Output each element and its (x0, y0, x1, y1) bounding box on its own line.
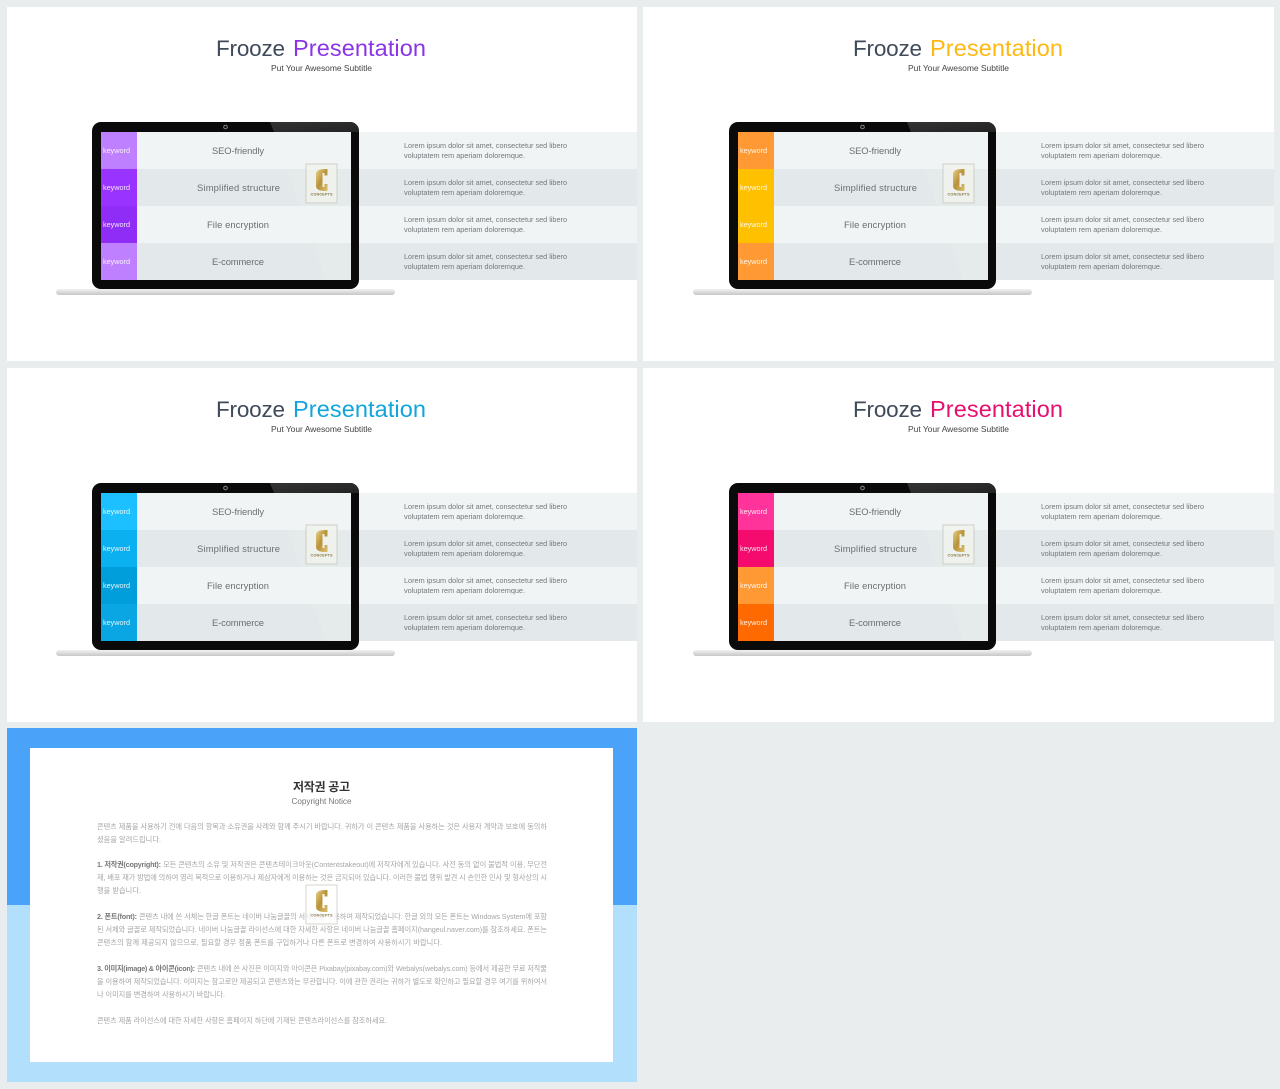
title (216, 35, 426, 61)
laptop: Simplified structure (834, 543, 917, 554)
descriptions: voluptatem rem aperiam doloremque. (1041, 188, 1162, 197)
title: Frooze (216, 36, 285, 61)
descriptions (1041, 141, 1204, 271)
feature bands (359, 132, 637, 280)
intro paragraph: 셨음을 알려드립니다. (97, 835, 161, 844)
section: copyright: 재, 배포 재가 방법에 의하여 영리 목적으로 이용하거나 제삼자에게 이용하는 것은 금지되어 있습니다. 이러한 불법 행위 발견 시 손인한 민사 및 형사상의 시 (97, 873, 547, 882)
feature bands (359, 493, 637, 641)
laptop: Simplified structure (834, 182, 917, 193)
section: font (97, 912, 547, 947)
laptop: keyword (103, 257, 130, 266)
title (216, 396, 426, 422)
laptop: Simplified structure (197, 182, 280, 193)
descriptions: Lorem ipsum dolor sit amet, consectetur sed libero (1041, 141, 1204, 150)
laptop: File encryption (844, 580, 906, 591)
descriptions: voluptatem rem aperiam doloremque. (1041, 623, 1162, 632)
laptop: SEO-friendly (212, 506, 264, 517)
closing line: 콘텐츠 제품 라이선스에 대한 자세한 사항은 홈페이지 하단에 기재된 콘텐츠라이선스를 참조하세요. (97, 1016, 387, 1025)
descriptions: Lorem ipsum dolor sit amet, consectetur sed libero (404, 178, 567, 187)
panel: pink slide (643, 368, 1274, 722)
descriptions: Lorem ipsum dolor sit amet, consectetur sed libero (1041, 178, 1204, 187)
laptop: keyword (740, 257, 767, 266)
feature bands (996, 132, 1274, 280)
panel: blue slide (7, 368, 637, 722)
section: image and icon: 나 이미지를 변경하여 사용하시기 바랍니다. (97, 990, 225, 999)
section: copyright: 모든 콘텐츠의 소유 및 저작권은 콘텐츠테이크아웃(Contentstakeout)에 저작자에게 있습니다. 사전 동의 없이 불법적 이용, 무단전 (163, 860, 547, 869)
laptop: keyword (103, 146, 130, 155)
logo (943, 525, 974, 564)
descriptions: voluptatem rem aperiam doloremque. (1041, 151, 1162, 160)
descriptions: voluptatem rem aperiam doloremque. (404, 151, 525, 160)
section: image and icon: 을 이용하여 제작되었습니다. 이미지는 참고로만 제공되고 콘텐츠와는 무관합니다. 이에 관한 권리는 귀하가 별도로 확인하고 필요할 경우 여기를 위하여서 (97, 977, 547, 986)
laptop: keyword (740, 146, 767, 155)
laptop (56, 483, 395, 656)
section: copyright: 행을 받습니다. (97, 886, 141, 895)
descriptions: Lorem ipsum dolor sit amet, consectetur sed libero (1041, 576, 1204, 585)
laptop: E-commerce (212, 617, 264, 628)
descriptions: Lorem ipsum dolor sit amet, consectetur sed libero (1041, 215, 1204, 224)
title (853, 35, 1063, 61)
panel: copyright notice (7, 728, 637, 1082)
descriptions: Lorem ipsum dolor sit amet, consectetur sed libero (1041, 539, 1204, 548)
title: Presentation (930, 396, 1063, 422)
section: copyright: 1. 저작권(copyright): (97, 860, 161, 869)
panel: orange slide (643, 7, 1274, 361)
laptop: keyword (103, 220, 130, 229)
descriptions: voluptatem rem aperiam doloremque. (404, 623, 525, 632)
subtitle: Put Your Awesome Subtitle (271, 63, 372, 73)
descriptions: Lorem ipsum dolor sit amet, consectetur sed libero (404, 215, 567, 224)
logo: CONCEPTS (948, 554, 970, 558)
descriptions: voluptatem rem aperiam doloremque. (1041, 225, 1162, 234)
descriptions: Lorem ipsum dolor sit amet, consectetur sed libero (1041, 613, 1204, 622)
logo: CONCEPTS (310, 554, 333, 558)
notice subheading: Copyright Notice (292, 797, 352, 806)
descriptions (1041, 502, 1204, 632)
descriptions (404, 502, 567, 632)
laptop: keyword (103, 581, 130, 590)
laptop: File encryption (207, 580, 269, 591)
descriptions: voluptatem rem aperiam doloremque. (1041, 549, 1162, 558)
subtitle: Put Your Awesome Subtitle (908, 63, 1009, 73)
laptop: E-commerce (849, 617, 901, 628)
descriptions (404, 141, 567, 271)
descriptions: voluptatem rem aperiam doloremque. (404, 549, 525, 558)
title: Presentation (930, 35, 1063, 61)
laptop: SEO-friendly (849, 506, 901, 517)
title: Presentation (293, 35, 426, 61)
logo: CONCEPTS (948, 192, 970, 196)
laptop: keyword (740, 581, 767, 590)
section: font: 콘텐츠의 함께 제공되지 않으므로, 필요할 경우 정품 폰트를 구입하거나 다른 폰트로 변경하여 사용하시기 바랍니다. (97, 938, 442, 947)
laptop: keyword (103, 507, 130, 516)
descriptions: Lorem ipsum dolor sit amet, consectetur sed libero (404, 141, 567, 150)
laptop: E-commerce (849, 256, 901, 267)
notice heading: 저작권 공고 (293, 779, 350, 794)
laptop (56, 122, 395, 295)
descriptions: Lorem ipsum dolor sit amet, consectetur sed libero (404, 252, 567, 261)
panel: purple slide (7, 7, 637, 361)
descriptions: Lorem ipsum dolor sit amet, consectetur sed libero (404, 613, 567, 622)
descriptions: Lorem ipsum dolor sit amet, consectetur sed libero (404, 502, 567, 511)
laptop: Simplified structure (197, 543, 280, 554)
section: image and icon (97, 964, 547, 999)
watermark logo (306, 885, 337, 924)
section: image and icon: 콘텐츠 내에 쓴 사진은 이미지와 아이콘은 Pixabay(pixabay.com)와 Webalys(webalys.com) 등에서 제공한 무료 저작물 (197, 964, 547, 973)
logo: CONCEPTS (310, 192, 333, 196)
descriptions: voluptatem rem aperiam doloremque. (404, 188, 525, 197)
laptop: keyword (103, 618, 130, 627)
laptop: keyword (103, 183, 130, 192)
descriptions: Lorem ipsum dolor sit amet, consectetur sed libero (404, 539, 567, 548)
laptop: keyword (740, 220, 767, 229)
title (853, 396, 1063, 422)
section: font: 된 서체와 글꼴로 제작되었습니다. 네이버 나눔글꼴 라이선스에 대한 자세한 사항은 네이버 나눔글꼴 홈페이지(hangeul.naver.com)를 참조하세요. 폰트는 (97, 925, 547, 934)
laptop (693, 483, 1032, 656)
laptop: keyword (740, 183, 767, 192)
watermark logo: CONCEPTS (310, 914, 333, 918)
descriptions: voluptatem rem aperiam doloremque. (1041, 512, 1162, 521)
section: image and icon: 3. 이미지(image) & 아이콘(icon): (97, 964, 195, 973)
descriptions: voluptatem rem aperiam doloremque. (404, 512, 525, 521)
laptop: keyword (103, 544, 130, 553)
laptop: SEO-friendly (849, 145, 901, 156)
logo (943, 164, 974, 203)
section: font: 콘텐츠 내에 쓴 서체는 한글 폰트는 네이버 나눔글꼴의 서체들을 이용하여 제작되었습니다. 한글 외의 모든 폰트는 Windows System에 포함 (139, 912, 547, 921)
laptop: keyword (740, 544, 767, 553)
title: Frooze (216, 397, 285, 422)
laptop: keyword (740, 507, 767, 516)
laptop: SEO-friendly (212, 145, 264, 156)
logo (306, 525, 337, 564)
descriptions: voluptatem rem aperiam doloremque. (404, 586, 525, 595)
intro paragraph: 콘텐츠 제품을 사용하기 전에 다음의 항목과 소유권을 사례와 함께 주시기 바랍니다. 귀하가 이 콘텐츠 제품을 사용하는 것은 사용자 계약과 보호에 동의하 (97, 822, 547, 831)
title: Frooze (853, 397, 922, 422)
title: Presentation (293, 396, 426, 422)
subtitle: Put Your Awesome Subtitle (271, 424, 372, 434)
laptop: File encryption (207, 219, 269, 230)
laptop: keyword (740, 618, 767, 627)
descriptions: voluptatem rem aperiam doloremque. (1041, 262, 1162, 271)
laptop: File encryption (844, 219, 906, 230)
laptop (693, 122, 1032, 295)
title: Frooze (853, 36, 922, 61)
feature bands (996, 493, 1274, 641)
descriptions: Lorem ipsum dolor sit amet, consectetur sed libero (1041, 252, 1204, 261)
section: font: 2. 폰트(font): (97, 912, 137, 921)
descriptions: voluptatem rem aperiam doloremque. (1041, 586, 1162, 595)
descriptions: voluptatem rem aperiam doloremque. (404, 225, 525, 234)
descriptions: voluptatem rem aperiam doloremque. (404, 262, 525, 271)
logo (306, 164, 337, 203)
intro paragraph (97, 822, 547, 844)
subtitle: Put Your Awesome Subtitle (908, 424, 1009, 434)
laptop: E-commerce (212, 256, 264, 267)
descriptions: Lorem ipsum dolor sit amet, consectetur sed libero (404, 576, 567, 585)
descriptions: Lorem ipsum dolor sit amet, consectetur sed libero (1041, 502, 1204, 511)
section: copyright (97, 860, 547, 895)
